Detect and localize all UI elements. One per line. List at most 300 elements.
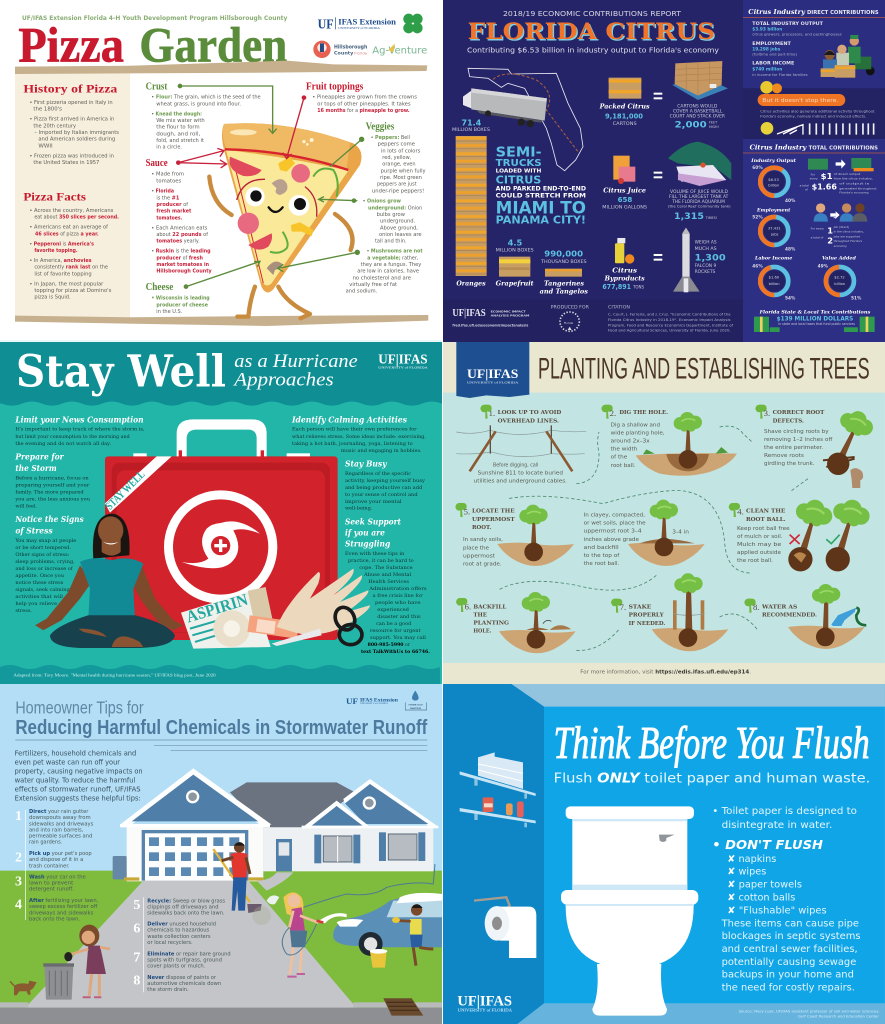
chart: labor income donut: billion	[769, 282, 780, 286]
text: pizza facts bullets: 46 slices of pizza a year.	[35, 231, 99, 237]
citation: Florida Citrus Industry in 2018-19". Economic Impact Analysis	[608, 318, 731, 322]
step 1: look up: 1.	[489, 408, 495, 418]
section: identify calming activities: Identify Calming Activities	[291, 414, 407, 424]
section: fruit toppings: • Pineapples are grown from the crowns	[312, 95, 417, 101]
title	[15, 697, 427, 739]
driveway and street	[0, 872, 442, 1024]
report heading: 2018/19 ECONOMIC CONTRIBUTIONS REPORT	[503, 10, 682, 18]
chart: labor income donut: 54%	[785, 295, 796, 301]
stat: industry multiplier: of	[805, 187, 809, 191]
section: crust: • Knead the dough:	[151, 111, 202, 117]
callout: semi trucks to Panama City	[496, 146, 586, 227]
section: prepare for the storm: family. The more prepared	[15, 490, 84, 496]
section: sauce: • Made from	[151, 172, 184, 178]
text: pizza facts bullets: consistently rank last on the	[34, 265, 108, 271]
step 3: correct root defects: Shave circling roots by	[764, 429, 829, 435]
section: notice the signs of stress: activities that will	[15, 594, 64, 600]
step 5: locate the uppermost root: to the top of	[584, 553, 620, 559]
tips 1-4	[15, 809, 99, 922]
intro text: Extension suggests these helpful tips:	[15, 794, 141, 802]
section: cheese: Cheese	[146, 282, 174, 293]
title: Reducing Harmful Chemicals in Stormwater Runoff	[15, 716, 427, 739]
stat: jobs multiplier: For every	[811, 226, 824, 230]
step 2: dig the hole: Dig a shallow and	[611, 423, 660, 429]
panel: Stormwater Runoff	[0, 684, 442, 1024]
callout: semi trucks to Panama City: AND PARKED END-TO-END	[496, 185, 586, 192]
chart: employment donut: 52%	[752, 214, 763, 220]
step 5: locate the uppermost root: LOCATE THE	[472, 509, 515, 515]
section: veggies: • Mushrooms are not	[367, 249, 423, 255]
grass clippings	[252, 906, 271, 925]
text: cartons comparison: CARTONS WOULD	[677, 104, 717, 109]
step 2: dig the hole: root ball.	[611, 463, 636, 469]
section: notice the signs of stress: You may snap at people	[14, 538, 77, 544]
text: cartons comparison: FEET	[709, 120, 718, 124]
logo tag: UF IFAS: UF|IFAS	[467, 367, 518, 381]
stat: tangerines and tangelos: 990,000	[544, 250, 583, 259]
heading: don't flush: • DON'T FLUSH	[712, 838, 823, 852]
stat: citrus juice: MILLION GALLONS	[602, 205, 647, 211]
section: stay busy: to your sense of control and	[345, 492, 418, 498]
section: seek support: can be a good	[376, 621, 411, 627]
text: cartons comparison: COURT AND STACK OVER	[670, 114, 725, 119]
heading: direct contributions: DIRECT CONTRIBUTIONS	[807, 10, 879, 16]
tips 5-8: clippings off driveways and	[147, 904, 219, 910]
stat: packed citrus: 9,181,000	[605, 112, 643, 120]
step 6: backfill	[456, 592, 576, 653]
step 3: correct root defects: removing 1–2 inches off	[764, 437, 833, 443]
section: identify calming activities: music and engaging in hobbies.	[341, 448, 422, 454]
step 5: locate the uppermost root: the root ball.	[584, 561, 620, 567]
section: stay busy: activity, keeping yourself busy	[345, 478, 425, 484]
section: sauce: producer of fresh	[156, 255, 203, 261]
chart: value added donut	[818, 256, 862, 301]
section: fruit toppings: 16 months for a pineapple to grow.	[317, 108, 410, 114]
section: seek support: practice, it can be hard to	[348, 558, 414, 564]
tips 1-4: 3	[15, 874, 22, 889]
text: history bullets: • First pizzeria opened in Italy in	[29, 100, 113, 106]
text: rockets comparison: MUCH AS	[695, 246, 717, 251]
illustration: first aid supplies	[181, 569, 370, 649]
callout: semi trucks to Panama City: TRUCKS	[496, 158, 542, 169]
chart: value added donut: billion	[834, 282, 845, 286]
chart: labor income donut: 46%	[752, 263, 763, 269]
chart: industry output donut: 40%	[785, 198, 796, 204]
step 2: dig the hole: the width	[611, 447, 637, 453]
stat: oranges: Oranges	[456, 281, 486, 288]
text: pizza facts bullets: • In America, anchovies	[29, 258, 92, 264]
section: notice the signs of stress: sleep problems, crying,	[15, 559, 75, 565]
chart: industry output donut	[750, 158, 797, 204]
tips 1-4: trash container.	[29, 863, 70, 869]
text: aquarium comparison: (the Coral Reef Community tank)	[668, 205, 731, 209]
text: consequences: backups in your home and	[722, 970, 854, 981]
section: veggies: peppers come	[378, 142, 415, 148]
illustration: toilet	[561, 806, 698, 1016]
chart: employment donut: Employment	[756, 207, 791, 213]
tips 1-4: downspouts away from	[29, 815, 91, 821]
text: aquarium comparison	[668, 189, 731, 222]
section: fruit toppings: or tops of other pineapples. It takes	[317, 101, 411, 107]
tips 5-8: cover plants or mulch.	[147, 964, 206, 970]
step 6: backfill: PLANTING	[473, 621, 509, 627]
section: notice the signs of stress: help you relieve	[15, 601, 57, 607]
logos: County	[334, 50, 353, 56]
text: cartons comparison: COVER A BASKETBALL	[673, 109, 723, 114]
section: seek support: Administration offers	[368, 586, 427, 592]
tips 5-8: automotive chemicals down	[147, 981, 221, 987]
stat: oranges	[452, 118, 490, 288]
callout: semi trucks to Panama City: MIAMI TO	[496, 198, 586, 217]
step 4: clean the root ball: ROOT BALL.	[746, 517, 786, 523]
tips 5-8: spots with turfgrass, ground	[147, 957, 222, 963]
stat: grapefruit: MILLION BOXES	[496, 247, 534, 253]
step 7: stake: PROPERLY	[629, 613, 665, 619]
list: don't flush items	[727, 854, 827, 916]
tips 5-8: Never dispose of paints or	[147, 975, 217, 981]
stat: jobs multiplier: 1	[827, 225, 833, 235]
heading: total contributions: Citrus Industry	[750, 143, 808, 151]
icon: dog	[10, 981, 37, 995]
text: pizza facts bullets: favorite topping.	[34, 248, 78, 254]
stat: jobs multiplier: jobs are supported	[833, 234, 860, 238]
section: notice the signs of stress: stress.	[15, 608, 33, 614]
section: seek support: Abuse and Mental	[363, 572, 412, 578]
chart: industry output donut: billion	[768, 184, 779, 188]
text: aquarium comparison: TIMES!	[705, 216, 717, 220]
illustration: Falcon 9 rocket	[673, 228, 700, 292]
chart: employment donut: jobs	[770, 233, 779, 237]
logos: WATER	[410, 708, 422, 710]
text: history bullets: the 20th century	[33, 123, 76, 129]
direct contribution stats: (fulltime and part-time)	[752, 53, 798, 57]
tips 5-8: Deliver unused household	[147, 922, 216, 928]
logos: UNIVERSITY of FLORIDA	[338, 26, 381, 30]
illustration: car being washed	[333, 893, 442, 968]
direct contribution stats: $3.93 billion	[752, 27, 782, 33]
title: Pizza Garden: Pizza	[18, 17, 124, 73]
text: history bullets: the 1800's	[33, 107, 62, 113]
text: toilet paper note: disintegrate in water.	[722, 820, 832, 831]
stat: industry multiplier: every	[810, 176, 818, 180]
intro text: water quality. To reduce the harmful	[15, 776, 135, 784]
heading: Pizza Facts: Pizza Facts	[23, 190, 86, 204]
step 5: locate the uppermost root: In sandy soils,	[463, 537, 503, 543]
section: veggies: are low in calories, have	[357, 269, 419, 275]
step 1: look up: utilities and underground cables.	[474, 478, 567, 484]
section: veggies	[346, 121, 426, 295]
stat: jobs multiplier: economy.	[834, 244, 847, 248]
direct contribution stats	[752, 21, 842, 77]
section: sauce: fresh market	[156, 209, 192, 215]
stat: jobs multiplier: job (direct)	[833, 225, 849, 229]
tips 5-8: 8	[133, 974, 140, 989]
section: veggies: orange, even	[382, 162, 416, 168]
person: girl with trash can	[43, 925, 110, 1000]
section: veggies: underground: Onion	[368, 205, 422, 211]
list: don't flush items: ✘ paper towels	[727, 880, 802, 891]
produced for: PRODUCED FOR	[551, 304, 589, 310]
section: prepare for the storm: you are, the less anxious you	[14, 497, 90, 503]
step 5: locate the uppermost root: ROOT.	[472, 525, 491, 531]
chart: labor income donut: Labor Income	[754, 256, 792, 262]
tips 5-8: the storm drain.	[147, 987, 189, 993]
step 7: stake: STAKE	[629, 605, 652, 611]
section: sauce: Hillsborough County	[156, 269, 212, 275]
text: rockets comparison: 1,300	[695, 253, 726, 263]
section: notice the signs of stress: of Stress	[15, 525, 53, 535]
stat: jobs multiplier: throughout Florida's	[834, 239, 863, 243]
section: crust: in a circle.	[156, 145, 182, 151]
section: veggies: tall and thin.	[375, 239, 407, 245]
section: veggies: they are a fungus. They	[361, 262, 421, 268]
chart: industry output donut: Industry Output	[750, 158, 797, 164]
section: veggies: peppers are just	[377, 182, 417, 188]
chart: value added donut: Value Added	[822, 256, 857, 262]
section: fruit toppings: Fruit toppings	[306, 81, 363, 92]
section: prepare for the storm: the Storm	[15, 463, 57, 473]
tips 5-8: or local recyclers.	[147, 940, 193, 946]
section: sauce: • Each American eats	[151, 225, 208, 231]
heading: total contributions	[743, 143, 885, 153]
icon: citrus workers with tractor	[821, 35, 875, 78]
subtitle: Approaches	[232, 369, 334, 390]
stat: tangerines and tangelos: Tangerines	[544, 280, 584, 288]
stat: tangerines and tangelos: and Tangelos	[540, 288, 588, 296]
chart: value added donut: 51%	[851, 295, 862, 301]
panel: Planting and Establishing Trees	[443, 342, 885, 684]
text: toilet paper note	[712, 806, 857, 831]
tips 1-4: sweep excess fertilizer off	[29, 904, 98, 910]
section: seek support: Even with these tips in	[345, 551, 404, 557]
logos: THINK H2O	[408, 705, 423, 707]
chart: labor income donut: $1.60	[769, 276, 780, 280]
source note: Adapted from: Tory Moore. "Mental health during hurricane season," UF/IFAS blog post, June 2020	[13, 674, 216, 679]
section: veggies: Above ground,	[380, 225, 418, 231]
tips 1-4: rain gardens.	[29, 840, 63, 846]
logos: UF	[318, 18, 334, 33]
text: pizza facts bullets: topping for pizza at Domino's	[34, 288, 112, 294]
tips 1-4: After fertilizing your lawn,	[29, 898, 99, 904]
callout: state and local tax contributions: Florida State & Local Tax Contributions	[759, 309, 871, 315]
stat: packed citrus: CARTONS	[613, 121, 637, 127]
direct contribution stats: EMPLOYMENT	[752, 41, 792, 47]
step 4: clean the root ball: Mulch may be	[737, 542, 781, 548]
text: aquarium comparison: THE FLORIDA AQUARIUM	[671, 199, 725, 204]
section: limit your news consumption: It's important to keep track of where the storm is,	[15, 427, 145, 433]
section: notice the signs of stress	[14, 514, 84, 614]
section: crust: fold, and stretch it	[156, 138, 204, 144]
text: pizza facts bullets: list of favorite topping	[34, 271, 92, 277]
section: notice the signs of stress: notice these stress	[15, 580, 64, 586]
person: man sweeping	[213, 842, 262, 913]
section: sauce: • Florida	[151, 189, 174, 195]
logos	[346, 691, 427, 710]
tips 1-4: permeable surfaces and	[29, 833, 92, 839]
stat: citrus byproducts	[602, 238, 662, 291]
section: crust	[146, 81, 261, 151]
person: woman with hose	[267, 864, 435, 977]
person: boy washing car	[392, 904, 433, 966]
map of Florida with route	[468, 68, 583, 171]
text: history bullets: • Pizza first arrived in America in	[29, 117, 114, 123]
section: sauce: tomatoes.	[156, 215, 182, 221]
stat: tangerines and tangelos: THOUSAND BOXES	[540, 259, 587, 265]
callout: semi trucks to Panama City: SEMI-	[496, 146, 542, 161]
chart: employment donut	[752, 207, 796, 253]
logos	[313, 14, 428, 58]
chart: employment donut: 37,431	[768, 227, 781, 231]
section: notice the signs of stress: Notice the Signs	[14, 514, 84, 524]
section: seek support: Health Services	[368, 579, 410, 585]
icon: semi truck	[463, 88, 547, 127]
section: veggies: under-ripe peppers!	[372, 188, 424, 194]
heading: direct contributions: Citrus Industry	[748, 8, 806, 16]
stat: industry multiplier: For	[811, 173, 816, 177]
tips 5-8: Eliminate or repair bare ground	[147, 951, 231, 957]
section: veggies: onion leaves are	[379, 232, 422, 238]
step 2: dig the hole: of the	[611, 455, 627, 461]
text: consequences: potentially causing sewage	[722, 957, 856, 968]
step 4: clean the root ball: Keep root ball free	[737, 526, 790, 532]
text: rockets comparison	[695, 240, 726, 274]
step 1: look up	[456, 405, 586, 484]
citation: CITATION	[608, 304, 630, 310]
heading: total contributions: TOTAL CONTRIBUTIONS	[809, 145, 878, 151]
step 4: clean the root ball: 4.	[737, 506, 744, 516]
illustration: Florida Aquarium	[668, 142, 731, 186]
step 3: correct root defects: girdling the trunk.	[764, 461, 815, 467]
step 5: locate the uppermost root: place the	[463, 545, 489, 551]
logo: UF IFAS: UF|IFAS	[457, 994, 512, 1010]
step 5: locate the uppermost root: uppermost root 3–4	[584, 529, 642, 535]
section: seek support: cope. The Substance	[359, 565, 413, 571]
illustration: house	[113, 768, 439, 881]
step 5: locate the uppermost root: UPPERMOST	[472, 517, 515, 523]
tips 1-4: Pick up your pet's poop	[29, 851, 92, 857]
text: history bullets: – Imported by Italian immigrants	[34, 130, 119, 136]
step 6: backfill: 6.	[465, 601, 471, 611]
section: seek support: a free crisis line for	[373, 593, 423, 599]
heading: direct contributions	[743, 8, 885, 18]
stat: grapefruit	[496, 239, 534, 288]
direct contribution stats: TOTAL INDUSTRY OUTPUT	[752, 21, 824, 27]
step 1: look up: LOOK UP TO AVOID	[498, 410, 561, 416]
text: pizza facts bullets: pizza is Squid.	[34, 295, 71, 301]
callout: but it doesn't stop there: Florida's economy, namely indirect and induced effects.	[760, 115, 866, 119]
tips 1-4: back onto the lawn.	[29, 916, 80, 922]
step 5: locate the uppermost root: inches above grade	[584, 537, 639, 543]
text: consequences: These items can cause pipe	[721, 918, 859, 929]
text: pizza facts bullets: • Pepperoni is America's	[29, 241, 94, 247]
section: stay busy: well-being.	[345, 506, 373, 512]
section: veggies: bulbs grow	[377, 212, 405, 218]
section: crust: wheat grass, is ground into flour.	[156, 101, 241, 107]
text: consequences: and central sewer facilities,	[722, 944, 858, 955]
section: sauce: about 22 pounds of	[156, 232, 208, 238]
step 7: stake: 7.	[620, 602, 626, 612]
section: prepare for the storm: Before a hurricane, focus on	[15, 476, 89, 482]
footer logos: ECONOMIC IMPACT	[491, 310, 527, 314]
section: seek support: experienced	[377, 607, 409, 613]
chart: employment donut: 48%	[785, 247, 796, 253]
subtitle: as a Hurricane	[234, 351, 358, 372]
illustration: shelves	[460, 752, 536, 827]
tips 1-4: and dispose of it in a	[29, 857, 83, 863]
chart: industry output donut: $6.53	[768, 178, 779, 182]
list: don't flush items: ✘ "Flushable" wipes	[727, 905, 827, 916]
step 7: stake	[611, 573, 728, 651]
stat: citrus juice	[602, 156, 662, 211]
step 3: correct root defects	[755, 405, 877, 488]
intro text: effects of stormwater runoff, UF/IFAS	[15, 785, 141, 793]
step 3: correct root defects: Remove roots	[764, 453, 804, 459]
section: seek support: if you are	[345, 528, 385, 538]
text: rockets comparison: FALCON 9	[695, 263, 717, 268]
section: notice the signs of stress: Other signs of stress:	[15, 552, 70, 558]
logo: UF IFAS: UF|IFAS	[378, 351, 428, 366]
section: sauce: is the #1	[156, 195, 180, 201]
subtitle	[232, 351, 358, 390]
stat: citrus byproducts: 677,891	[602, 283, 631, 291]
subtitle: Flush ONLY toilet paper and human waste.	[554, 771, 870, 786]
section: veggies: underground.	[380, 219, 416, 225]
chart: value added donut: 49%	[818, 263, 829, 269]
tips 5-8: sidewalks back onto the lawn.	[147, 911, 225, 917]
stat: jobs multiplier: in the citrus industry,	[834, 230, 864, 234]
stat: oranges: MILLION BOXES	[452, 127, 490, 133]
text: cartons comparison	[670, 104, 725, 131]
produced for	[551, 304, 589, 331]
title: Stay Well: Stay Well	[16, 346, 226, 397]
footer logos: ANALYSIS PROGRAM	[491, 314, 529, 318]
panel: Think Before You Flush	[443, 684, 885, 1024]
chart: industry output donut: 60%	[752, 165, 763, 171]
list: don't flush items: ✘ wipes	[727, 867, 766, 878]
step 1: look up: Before digging, call	[493, 462, 538, 468]
step 5: locate the uppermost root: and backfill	[584, 545, 619, 551]
source note: Gulf Coast Research and Education Center	[798, 1015, 880, 1019]
step 2: dig the hole: around 2x–3x	[611, 439, 650, 445]
section: veggies: red, yellow,	[382, 155, 412, 161]
title: Pizza Garden	[18, 17, 287, 73]
tips 1-4: 4	[15, 898, 22, 913]
section: identify calming activities: taking a hot bath, journaling, yoga, listening to	[292, 441, 413, 447]
section: seek support: text TalkWithUs to 66746.	[361, 649, 430, 655]
text: pizza facts bullets: eat about 350 slices per second.	[34, 215, 119, 221]
intro text	[15, 749, 143, 802]
section: seek support	[345, 517, 430, 655]
stat: packed citrus: Packed Citrus	[599, 103, 650, 111]
list: don't flush items: ✘ napkins	[727, 854, 776, 865]
section: cheese: in the U.S.	[156, 309, 183, 315]
step 3: correct root defects: DEFECTS.	[773, 418, 804, 424]
section: veggies: • Peppers: Bell	[371, 135, 410, 141]
step 3: correct root defects: 3.	[764, 408, 770, 418]
section: veggies: • Onions grow	[363, 199, 401, 205]
callout: semi trucks to Panama City: COULD STRETCH FROM	[496, 193, 586, 200]
stat: tangerines and tangelos	[540, 250, 588, 296]
intro text: property, causing negative impacts on	[15, 767, 143, 775]
direct contribution stats: in income for Florida families	[752, 73, 808, 77]
step 5: locate the uppermost root: uppermost	[463, 553, 495, 559]
section: crust: • Flour: The grain, which is the seed of the	[151, 95, 261, 101]
illustration: first aid kit	[105, 419, 338, 640]
stat: citrus juice: Citrus Juice	[603, 186, 646, 194]
text: consequences	[721, 918, 861, 994]
panel: Stay Well	[0, 342, 442, 684]
section: notice the signs of stress: or be short tempered.	[15, 545, 72, 551]
